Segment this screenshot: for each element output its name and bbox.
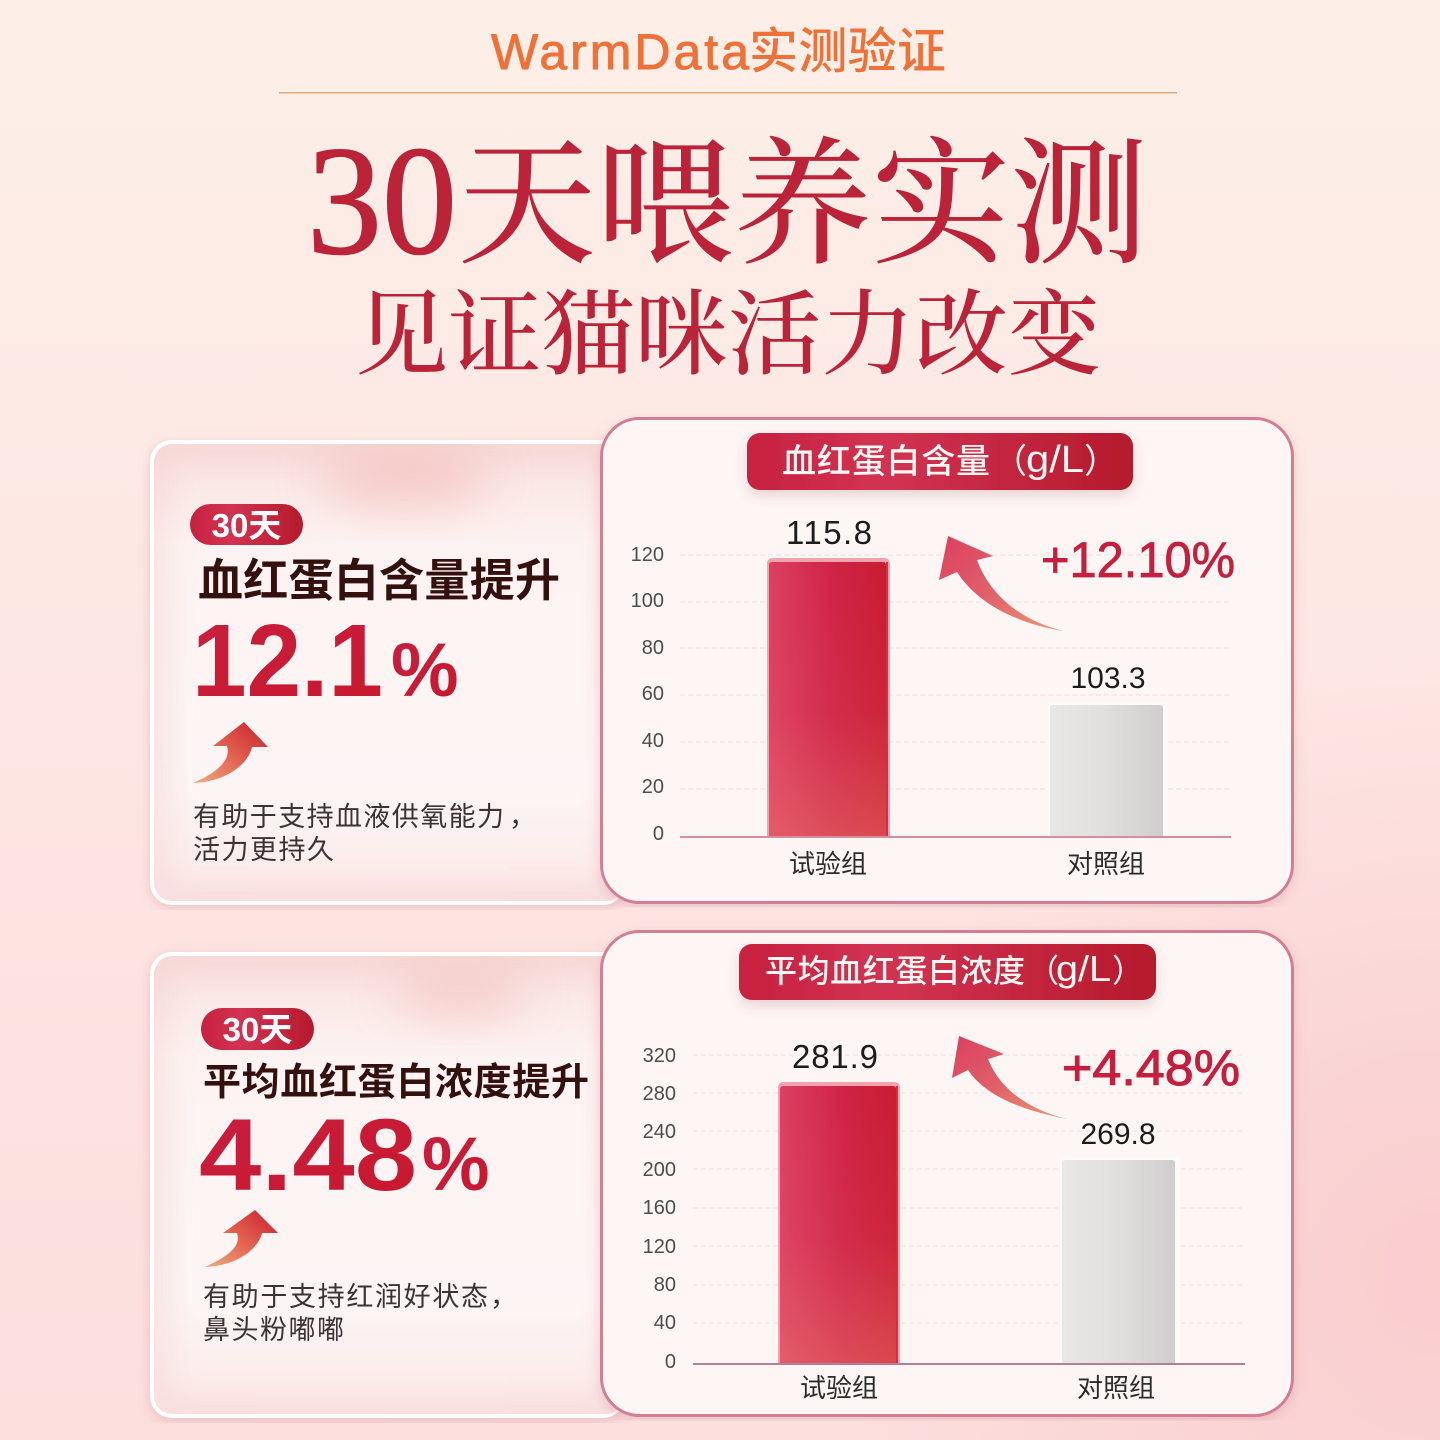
y axis labels: 160	[643, 1197, 676, 1219]
y axis labels: 20	[642, 776, 664, 798]
category labels	[789, 844, 1145, 881]
description	[203, 1275, 517, 1347]
chart title pill: ）	[1112, 946, 1144, 992]
y axis labels: 200	[643, 1159, 676, 1181]
y axis labels: 80	[642, 637, 664, 659]
icon: up arrow	[193, 722, 268, 783]
description: 有助于支持红润好状态	[203, 1275, 488, 1314]
title line 2: 见证猫咪活力改变	[355, 260, 1101, 394]
description: 鼻头粉嘟嘟	[203, 1308, 344, 1347]
panel: mean concentration chart	[602, 932, 1292, 1416]
y axis labels: 100	[631, 590, 664, 612]
value labels: 115.8	[786, 514, 872, 551]
description: 活力更持久	[193, 828, 334, 867]
category labels	[800, 1368, 1155, 1405]
value labels: 281.9	[792, 1038, 878, 1075]
gridlines	[680, 555, 1231, 789]
description	[193, 795, 536, 867]
bar: control group	[1048, 702, 1168, 836]
badge: 30 days	[190, 504, 303, 545]
description: ，	[490, 1275, 517, 1314]
bar: control group	[1060, 1157, 1180, 1364]
chart title pill: 血红蛋白含量	[782, 434, 990, 483]
chart title pill	[739, 944, 1156, 1000]
y axis labels: 280	[643, 1083, 676, 1105]
icon: up arrow	[205, 1210, 278, 1267]
bar: test group	[778, 1082, 900, 1364]
chart title pill: （	[1027, 946, 1059, 992]
big number: %	[391, 628, 459, 713]
y axis labels: 320	[643, 1045, 676, 1067]
eyebrow heading	[491, 12, 946, 83]
description: ，	[509, 795, 536, 834]
y axis labels: 60	[642, 683, 664, 705]
y axis labels: 40	[654, 1312, 676, 1334]
panel: hemoglobin chart	[602, 418, 1292, 902]
value labels: 103.3	[1070, 662, 1146, 695]
chart title pill: 平均血红蛋白浓度	[765, 946, 1025, 992]
y axis labels: 0	[665, 1351, 676, 1373]
chart title pill	[747, 433, 1133, 490]
big number: 12.1	[192, 603, 383, 718]
x axis	[680, 836, 1231, 838]
arrow: increase	[952, 1036, 1067, 1119]
chart title pill: g/L	[1056, 948, 1111, 989]
y axis labels	[643, 1045, 676, 1373]
category labels: 对照组	[1077, 1368, 1155, 1405]
y axis labels: 80	[654, 1274, 676, 1296]
y axis labels	[631, 544, 664, 845]
category labels: 试验组	[789, 844, 867, 881]
y axis labels: 40	[642, 730, 664, 752]
description: 有助于支持血液供氧能力	[193, 795, 504, 834]
panel: hemoglobin summary card	[150, 440, 625, 905]
eyebrow heading: 实测验证	[749, 12, 946, 83]
y axis labels: 240	[643, 1121, 676, 1143]
chart title pill: ）	[1084, 434, 1118, 483]
panel: mean concentration summary card	[150, 952, 625, 1418]
y axis labels: 0	[653, 823, 664, 845]
y axis labels: 120	[631, 544, 664, 566]
big number: %	[422, 1122, 490, 1207]
gridlines	[693, 1055, 1245, 1323]
big number	[199, 1098, 490, 1212]
chart title pill: g/L	[1026, 439, 1084, 481]
arrow: increase	[939, 536, 1063, 631]
eyebrow heading: WarmData	[491, 24, 749, 80]
value labels	[786, 514, 1146, 695]
card heading: 血红蛋白含量提升	[198, 544, 560, 609]
big number: 4.48	[199, 1098, 417, 1212]
title line 1: 天喂养实测	[458, 94, 1148, 292]
badge: 30 days	[201, 1008, 314, 1050]
y axis labels: 120	[643, 1236, 676, 1258]
chart title pill: （	[993, 434, 1027, 483]
badge: 30 days: 30天	[212, 507, 281, 544]
value labels	[792, 1038, 1156, 1151]
badge: 30 days: 30天	[223, 1011, 292, 1048]
bar: test group	[767, 558, 890, 836]
x axis	[693, 1363, 1245, 1365]
callout: +12.10%: +12.10%	[1041, 532, 1235, 588]
title line 1: 30	[307, 114, 457, 287]
callout: +4.48%: +4.48%	[1062, 1040, 1240, 1096]
card heading: 平均血红蛋白浓度提升	[203, 1051, 589, 1106]
category labels: 试验组	[800, 1368, 878, 1405]
heading rule	[279, 92, 1177, 94]
category labels: 对照组	[1067, 844, 1145, 881]
value labels: 269.8	[1080, 1118, 1156, 1151]
